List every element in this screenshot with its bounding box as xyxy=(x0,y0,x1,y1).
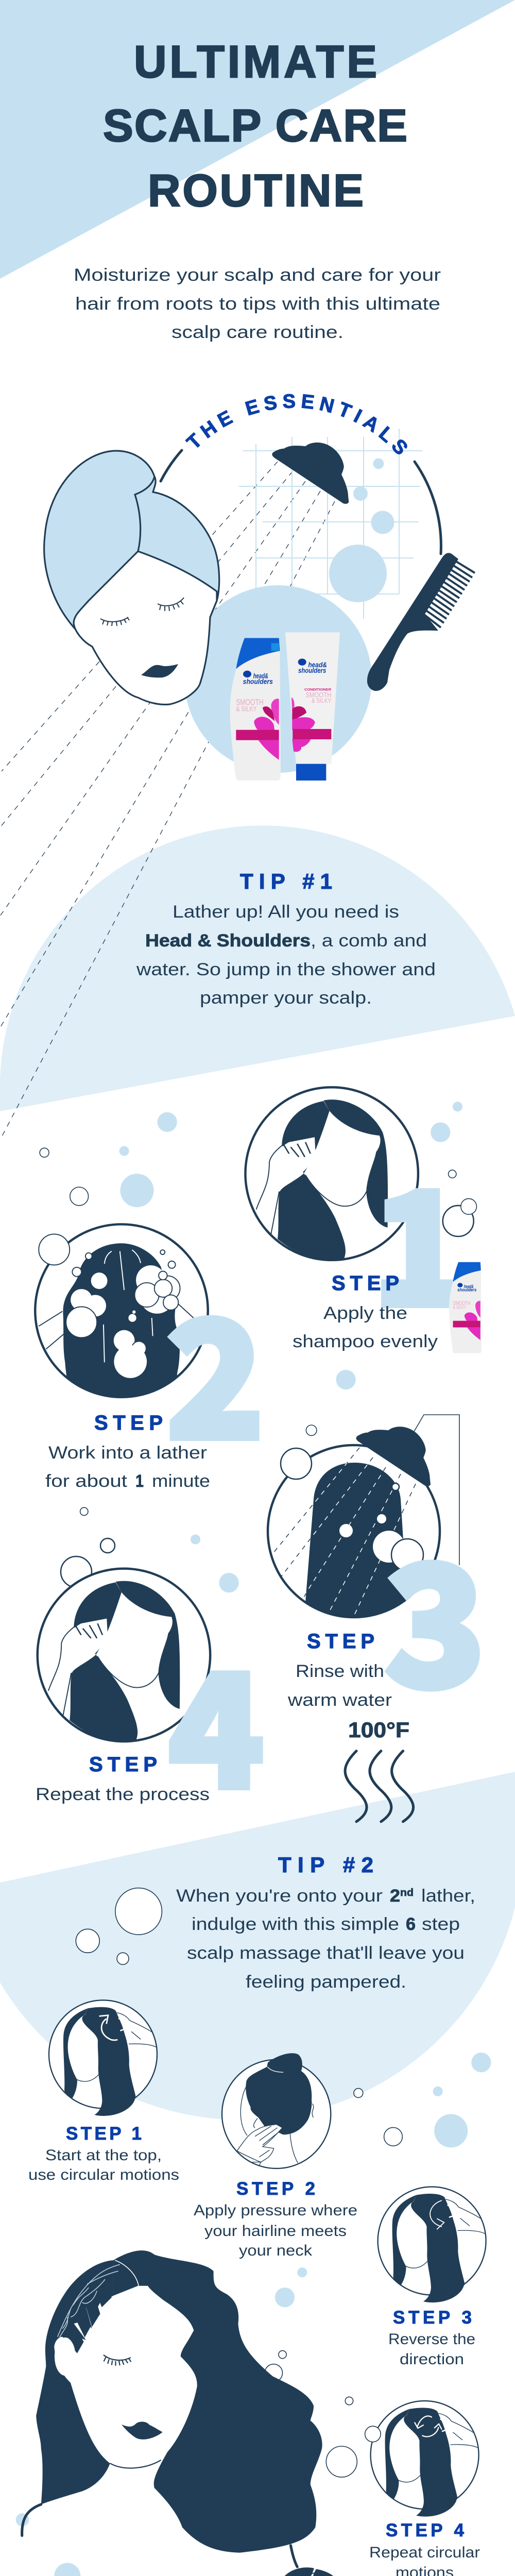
step 1 text: STEP xyxy=(332,1272,399,1295)
step 4: repeat xyxy=(36,1567,263,1804)
dashed water lines from shower xyxy=(0,462,335,1137)
numeral 3: 3 xyxy=(384,1493,486,1735)
tip 1 text xyxy=(136,869,436,1008)
massage step 1 illustration xyxy=(49,2000,157,2116)
intro text xyxy=(74,265,441,342)
left hair and braid side xyxy=(36,2260,113,2504)
massage step 4 illustration xyxy=(365,2401,479,2517)
bubbles: shampoo steps xyxy=(40,1101,476,1545)
tip 2 text: TIP #2 xyxy=(278,1853,373,1877)
step 1 text: shampoo evenly xyxy=(293,1332,438,1351)
massage step 3 text xyxy=(388,2308,475,2368)
tip 1 text: pamper your scalp. xyxy=(200,988,372,1008)
face outline xyxy=(110,2460,161,2468)
massage step 3 illustration xyxy=(378,2187,486,2302)
numeral 4: 4 xyxy=(168,1605,264,1833)
step 2 text: for about xyxy=(45,1471,128,1491)
massage step 2 text: Apply pressure where xyxy=(194,2202,357,2219)
shampoo bottle: head& xyxy=(253,672,268,680)
shower head xyxy=(356,1427,431,1486)
intro text: scalp care routine. xyxy=(171,323,344,342)
title xyxy=(103,36,407,216)
step 3 text xyxy=(287,1630,392,1710)
massage step 1 text: Start at the top, xyxy=(45,2147,162,2164)
shoulder and arm lines xyxy=(22,2504,297,2567)
closed eyes xyxy=(100,598,184,626)
tip 1 text: Head & Shoulders xyxy=(145,931,311,951)
conditioner tube: & SILKY xyxy=(312,697,331,704)
title: ROUTINE xyxy=(148,165,364,216)
shampoo bottle xyxy=(230,638,281,781)
step 2 text: minute xyxy=(152,1471,210,1491)
step 2: work into a lather xyxy=(35,1224,265,1491)
step 4 illustration xyxy=(38,1569,239,1742)
mini shampoo bottle: head& xyxy=(464,1284,474,1289)
tip 1 text: Lather up! All you need is xyxy=(173,902,399,922)
massage step 4 xyxy=(365,2401,480,2576)
temperature callout: 100°F xyxy=(348,1718,409,1742)
tip 2 text: scalp massage that'll leave you xyxy=(187,1943,465,1963)
step 4 text xyxy=(36,1753,210,1804)
step 3 text: STEP xyxy=(307,1630,374,1653)
tip 2 text: 2 xyxy=(390,1886,400,1906)
step 2 text: Work into a lather xyxy=(48,1443,207,1463)
essentials arc xyxy=(161,450,441,554)
intro text: hair from roots to tips with this ultimate xyxy=(75,294,440,314)
step 1 text: Apply the xyxy=(323,1303,407,1323)
bubbles: tip 2 xyxy=(76,1888,162,1964)
massage step 3 xyxy=(378,2187,486,2368)
tip 1 text: , a comb and xyxy=(311,931,427,951)
mini shampoo bottle xyxy=(449,1262,482,1353)
tip 2 text: When you're onto your xyxy=(176,1886,383,1906)
massage step 4 text xyxy=(369,2520,480,2576)
step 4 text: STEP xyxy=(89,1753,157,1776)
numeral 1: 1 xyxy=(372,1123,468,1350)
products: shampoo and conditioner xyxy=(230,632,340,781)
tip 1 text: TIP #1 xyxy=(240,869,332,893)
massage step 3 text: direction xyxy=(400,2351,464,2368)
bubbles xyxy=(61,1448,423,1587)
shower head xyxy=(272,443,349,504)
tip 1 text: water. So jump in the shower and xyxy=(136,960,436,979)
top corner triangle xyxy=(0,0,515,279)
step 2 text xyxy=(45,1412,210,1491)
panel: tip 2 background xyxy=(0,1772,515,2120)
temperature callout xyxy=(345,1718,414,1822)
step 2 text: STEP xyxy=(94,1412,163,1434)
tip 2 text: 6 xyxy=(406,1914,416,1934)
step 3 text: warm water xyxy=(287,1690,392,1710)
woman with towel xyxy=(44,451,219,704)
tip 2 text xyxy=(176,1853,475,1992)
massage step 4 text: Repeat circular xyxy=(369,2544,480,2561)
conditioner tube: CONDITIONER xyxy=(304,688,332,692)
tip 2 text: indulge with this simple xyxy=(192,1914,399,1934)
title: ULTIMATE xyxy=(134,36,377,87)
step 3 text: Rinse with xyxy=(296,1662,384,1681)
tip 2 text: nd xyxy=(400,1887,414,1899)
conditioner tube xyxy=(285,632,340,781)
massage step 3 text: STEP 3 xyxy=(393,2308,472,2328)
curved heading: the essentials: THE ESSENTIALS xyxy=(185,394,407,454)
bubbles xyxy=(184,459,394,773)
step 2 text: 1 xyxy=(135,1471,144,1491)
shampoo bottle: SMOOTH xyxy=(236,697,264,707)
massage step 3 text: Reverse the xyxy=(388,2331,475,2348)
massage step 2 text: your hairline meets xyxy=(204,2223,347,2240)
step 1: apply shampoo xyxy=(245,1087,482,1353)
title: SCALP CARE xyxy=(103,100,407,151)
tip 2 text: step xyxy=(422,1914,460,1934)
mini shampoo bottle: shoulders xyxy=(457,1287,476,1293)
massage step 1 text: use circular motions xyxy=(28,2166,179,2183)
steam xyxy=(345,1751,414,1822)
massage step 2 text xyxy=(194,2179,357,2259)
massage step 2 illustration xyxy=(222,2053,331,2168)
massage step 4 text: STEP 4 xyxy=(386,2520,465,2540)
massage step 1 text: STEP 1 xyxy=(66,2124,142,2144)
step 2 illustration xyxy=(35,1224,208,1402)
flowing hair xyxy=(113,2250,322,2553)
bubbles: massage section xyxy=(16,2053,491,2576)
shampoo bottle: shoulders xyxy=(243,677,273,685)
massage step 2 xyxy=(194,2053,357,2259)
massage step 5 illustration xyxy=(284,2567,333,2576)
tip 2 text: lather, xyxy=(421,1886,475,1906)
step 3: rinse xyxy=(61,1415,486,1735)
massage step 5 xyxy=(284,2567,333,2576)
tip 2 text: feeling pampered. xyxy=(246,1972,406,1992)
comb xyxy=(367,553,475,691)
step 3 illustration xyxy=(61,1427,440,1620)
step 1 illustration xyxy=(245,1087,418,1261)
large woman portrait xyxy=(22,2250,322,2567)
conditioner tube: SMOOTH xyxy=(305,690,331,699)
mini shampoo bottle: & SILKY xyxy=(453,1305,466,1310)
hairline fringe xyxy=(71,2286,197,2469)
massage step 2 text: your neck xyxy=(239,2242,313,2259)
step 4 text: Repeat the process xyxy=(36,1785,210,1804)
shampoo bottle: & SILKY xyxy=(236,705,257,713)
lips xyxy=(122,2421,163,2439)
intro text: Moisturize your scalp and care for your xyxy=(74,265,441,285)
grid backdrop xyxy=(239,429,422,619)
massage step 1 text xyxy=(28,2124,179,2183)
massage step 1 xyxy=(28,2000,179,2183)
massage step 2 text: STEP 2 xyxy=(236,2179,315,2199)
step 1 text xyxy=(293,1272,438,1351)
closed eye xyxy=(104,2355,131,2366)
essentials illustration xyxy=(43,394,475,781)
mini shampoo bottle: SMOOTH xyxy=(453,1300,471,1307)
braid xyxy=(58,2264,120,2338)
numeral 2: 2 xyxy=(166,1251,265,1485)
lips xyxy=(141,664,178,677)
conditioner tube: shoulders xyxy=(298,666,326,674)
panel: tip 1 background xyxy=(0,825,515,1111)
lather bubbles xyxy=(39,1234,180,1378)
conditioner tube: head& xyxy=(308,660,327,669)
ghost numeral outline xyxy=(413,1415,459,1565)
